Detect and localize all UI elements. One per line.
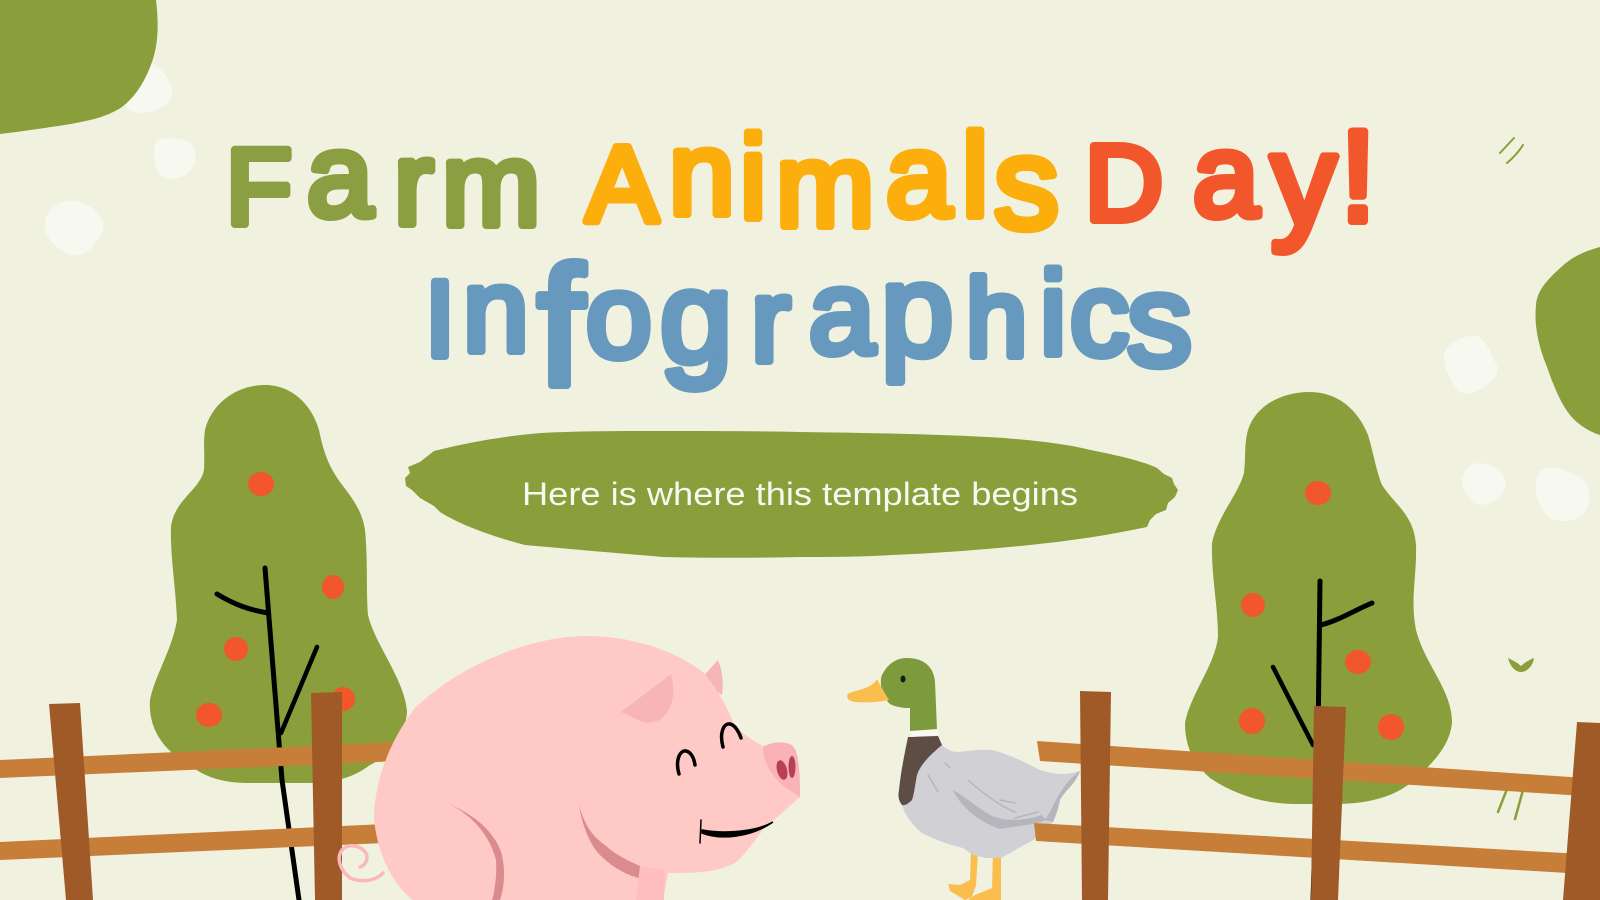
title line 1: m xyxy=(442,119,540,251)
title line 2: p xyxy=(881,237,953,383)
title line 1: ! xyxy=(1340,103,1376,249)
title line 1: A xyxy=(586,123,658,244)
title line 1: n xyxy=(669,108,735,240)
fence posts xyxy=(1080,691,1600,900)
pig nostrils xyxy=(775,756,796,781)
pig xyxy=(339,636,800,900)
title line 1: m xyxy=(776,120,874,252)
fruit xyxy=(1239,481,1404,740)
left fence xyxy=(0,692,400,900)
right green blob xyxy=(1535,247,1600,435)
title line 2: r xyxy=(751,255,790,387)
fence posts xyxy=(49,692,342,900)
pig body xyxy=(374,636,800,900)
title line 2: i xyxy=(1040,248,1066,380)
duck body xyxy=(902,745,1080,858)
banner text: Here is where this template begins xyxy=(522,476,1078,512)
tree canopy xyxy=(1185,392,1452,804)
icon: leaf sprout xyxy=(1508,658,1534,672)
fence rails xyxy=(1034,741,1600,875)
duck bill xyxy=(847,679,889,702)
left tree xyxy=(150,385,407,900)
duck chest xyxy=(898,736,942,805)
title line 2: o xyxy=(586,251,652,383)
title line 2: n xyxy=(463,245,529,377)
duck legs xyxy=(948,853,1001,900)
fruit xyxy=(196,472,355,727)
title line 1: F xyxy=(226,126,292,247)
title line 1: a xyxy=(886,110,952,242)
right tree xyxy=(1185,392,1452,900)
banner shape xyxy=(405,431,1178,558)
title line 2: s xyxy=(1127,247,1192,393)
title line 2: c xyxy=(1070,249,1129,381)
tree branches xyxy=(217,568,317,900)
duck tail shade xyxy=(1045,771,1080,822)
title line 1: a xyxy=(307,110,373,242)
title line 2: a xyxy=(809,247,875,379)
pig front leg xyxy=(636,866,665,900)
duck neck and head xyxy=(881,658,937,731)
duck xyxy=(847,658,1080,900)
duck feather marks xyxy=(928,763,1038,818)
icon: scratch marks xyxy=(1500,138,1523,163)
tree canopy xyxy=(150,385,407,783)
title line 1: a xyxy=(1193,110,1259,242)
title line 1: D xyxy=(1085,122,1163,243)
fence rails xyxy=(0,742,400,860)
top-left green blob xyxy=(0,0,158,134)
title line 2: g xyxy=(660,244,732,390)
title line 1: s xyxy=(994,110,1059,256)
duck collar xyxy=(910,729,938,737)
icon: grass xyxy=(1498,789,1523,819)
pig snout xyxy=(763,742,800,797)
title line 2: h xyxy=(966,257,1027,380)
pig crease xyxy=(579,805,656,879)
title xyxy=(226,103,1376,422)
pig haunch xyxy=(444,802,504,900)
pig near ear xyxy=(621,674,673,723)
duck eye xyxy=(900,676,906,682)
title line 1: r xyxy=(394,118,433,250)
subtitle banner xyxy=(405,431,1178,558)
title line 1: l xyxy=(962,110,988,242)
right fence xyxy=(1034,691,1600,900)
title line 1: i xyxy=(740,112,766,244)
duck wing feathers xyxy=(953,790,1046,829)
pig tail xyxy=(339,846,383,881)
pig eyes xyxy=(678,724,741,774)
decorative white blobs xyxy=(45,60,1590,521)
title line 2: I xyxy=(425,258,455,379)
title line 2: f xyxy=(537,232,585,422)
title line 1: y xyxy=(1271,107,1336,253)
pig far ear xyxy=(700,660,723,695)
pig mouth xyxy=(700,820,773,843)
tree branches xyxy=(1273,581,1372,900)
